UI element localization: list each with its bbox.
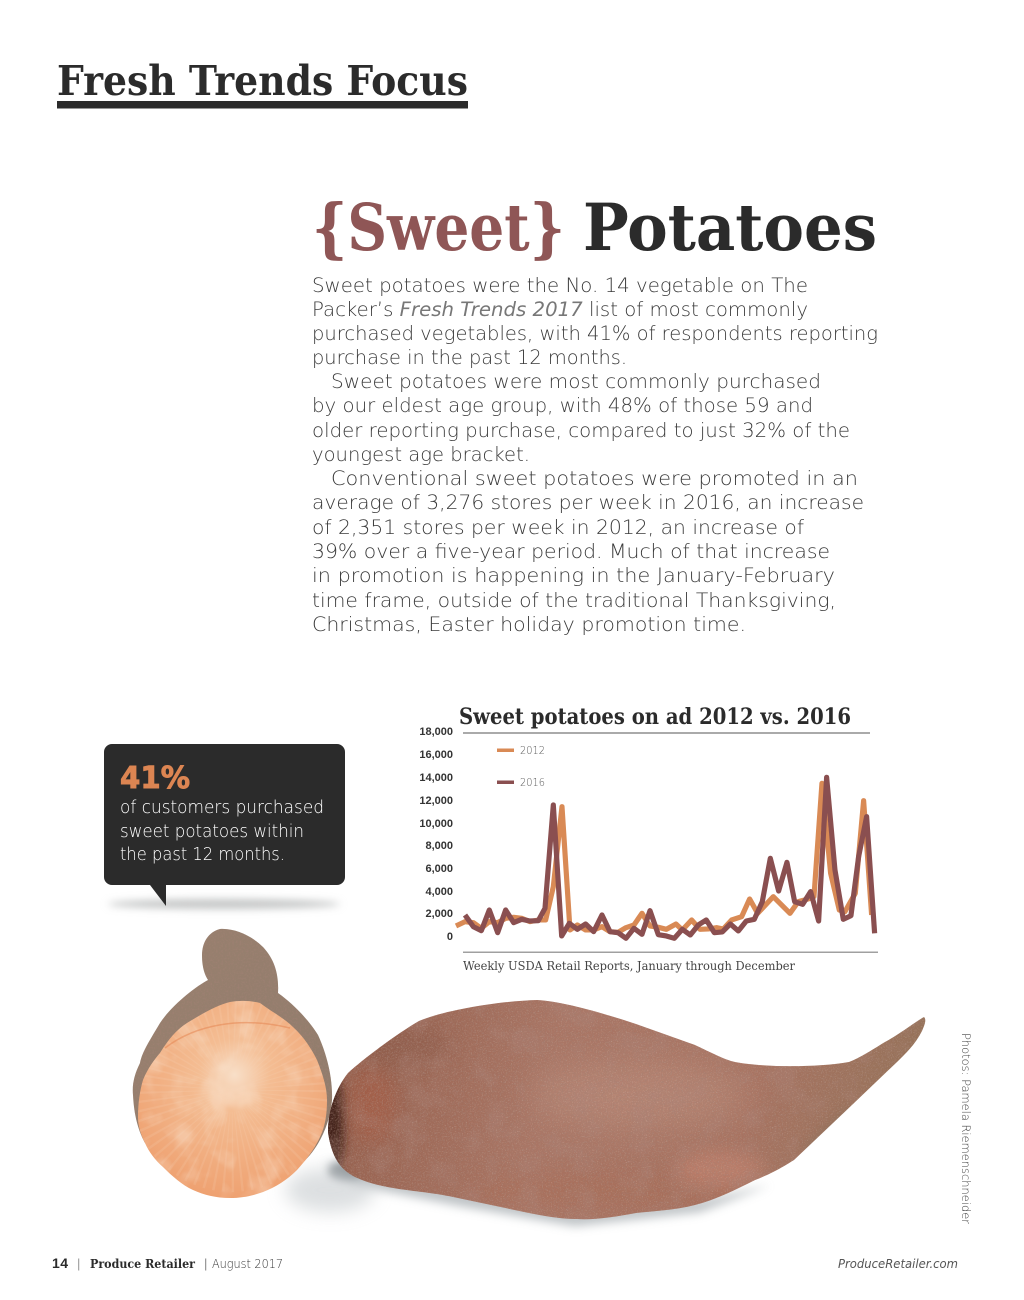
- line chart: sweet potatoes on ad: [419, 704, 878, 973]
- chart title: Sweet potatoes on ad 2012 vs. 2016: [459, 704, 851, 730]
- callout shadow: [108, 899, 340, 909]
- chart caption: Weekly USDA Retail Reports, January through December: [463, 959, 795, 973]
- y axis labels: 6,000: [425, 863, 453, 875]
- y axis labels: 2,000: [425, 908, 453, 920]
- y axis labels: 16,000: [419, 749, 453, 761]
- y axis labels: 8,000: [425, 840, 453, 852]
- callout text: [120, 798, 324, 865]
- body text: by our eldest age group, with 48% of those 59 and: [312, 394, 813, 417]
- title: {Sweet} Potatoes: [312, 190, 877, 266]
- potato shadow: [285, 1160, 770, 1226]
- legend: 2016: [520, 777, 545, 789]
- section heading: Fresh Trends Focus: Fresh Trends Focus: [57, 57, 468, 105]
- body text: purchased vegetables, with 41% of respondents reporting: [312, 322, 878, 345]
- body text: [312, 274, 878, 636]
- photo credit: Photos: Pamela Riemenschneider: [959, 1033, 973, 1224]
- body text: 39% over a five-year period. Much of that increase: [312, 540, 830, 563]
- body text: youngest age bracket.: [312, 443, 530, 466]
- body text: of 2,351 stores per week in 2012, an increase of: [312, 516, 804, 539]
- footer left: |: [77, 1256, 80, 1271]
- footer right: ProduceRetailer.com: [838, 1256, 958, 1271]
- body text: in promotion is happening in the January-February: [312, 564, 835, 587]
- photo: sweet potatoes: [130, 929, 930, 1226]
- body text: Packer’s Fresh Trends 2017 list of most commonly: [312, 298, 808, 321]
- footer left: August 2017: [212, 1256, 283, 1271]
- body text: Christmas, Easter holiday promotion time.: [312, 613, 746, 636]
- series 2016: [465, 777, 875, 938]
- y axis labels: 18,000: [419, 726, 453, 738]
- callout text: the past 12 months.: [120, 845, 285, 865]
- footer left: 14: [52, 1255, 68, 1271]
- legend: 2012: [520, 745, 545, 757]
- body text: time frame, outside of the traditional Thanksgiving,: [312, 589, 836, 612]
- y axis labels: 12,000: [419, 795, 453, 807]
- body text: purchase in the past 12 months.: [312, 346, 627, 369]
- footer left: Produce Retailer: [90, 1256, 195, 1271]
- callout text: sweet potatoes within: [120, 822, 304, 842]
- footer left: |: [204, 1256, 207, 1271]
- footer left: [52, 1255, 283, 1271]
- callout figure: 41%: [120, 761, 190, 796]
- body text: average of 3,276 stores per week in 2016, an increase: [312, 491, 864, 514]
- title: {Sweet} Potatoes: {Sweet}: [312, 190, 565, 266]
- y axis labels: 0: [447, 931, 453, 943]
- body text: Conventional sweet potatoes were promoted in an: [331, 467, 858, 490]
- callout bubble: [104, 744, 345, 906]
- body text: Sweet potatoes were the No. 14 vegetable on The: [312, 274, 808, 297]
- whole potato: [312, 995, 930, 1225]
- series 2012: [456, 783, 872, 932]
- title: {Sweet} Potatoes: Potatoes: [583, 190, 877, 266]
- y axis labels: 14,000: [419, 772, 453, 784]
- legend: [497, 745, 545, 789]
- cut potato: [130, 929, 335, 1205]
- y axis labels: 10,000: [419, 818, 453, 830]
- cut face: [138, 1000, 327, 1198]
- y axis labels: 4,000: [425, 886, 453, 898]
- body text: Sweet potatoes were most commonly purchased: [331, 370, 821, 393]
- body text: older reporting purchase, compared to just 32% of the: [312, 419, 850, 442]
- callout: 41% of customers: [104, 744, 345, 909]
- callout text: of customers purchased: [120, 798, 324, 818]
- y axis labels: [419, 726, 453, 943]
